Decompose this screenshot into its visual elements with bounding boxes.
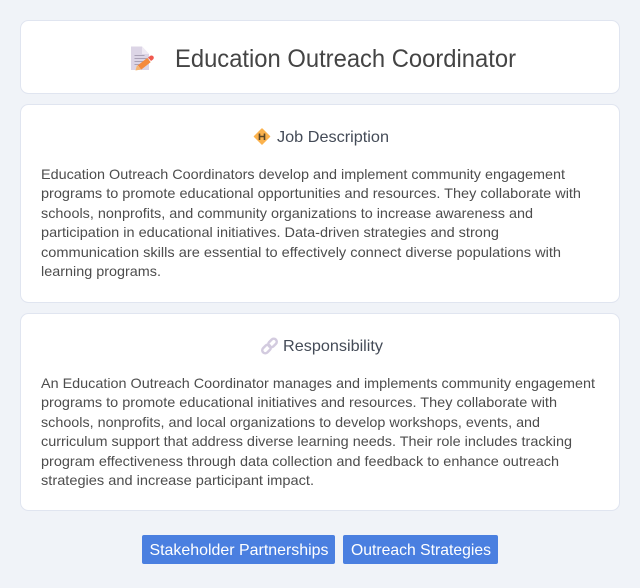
job description text: learning programs. <box>41 263 161 279</box>
panel: title <box>20 20 620 94</box>
responsibility text: schools, nonprofits, and local organizations to develop workshops, events, and <box>41 414 540 430</box>
responsibility heading: Responsibility <box>283 338 383 355</box>
job description text: programs to promote educational opportunities and resources. They collaborate with <box>41 185 581 201</box>
icon: orange diamond sign <box>254 129 270 144</box>
job description text: participation in educational initiatives. Data-driven strategies and strong <box>41 224 499 240</box>
tag: stakeholder partnerships <box>142 535 335 564</box>
job description heading: Job Description <box>277 129 389 146</box>
responsibility text: strategies and increase participant impact. <box>41 472 314 488</box>
responsibility text: curriculum support that address diverse learning needs. Their role includes tracking <box>41 433 572 449</box>
title text: Education Outreach Coordinator <box>175 45 516 73</box>
icon: chain link <box>261 338 278 354</box>
responsibility text <box>41 375 595 488</box>
icon: document with pencil <box>131 46 154 70</box>
job description text: schools, nonprofits, and community organizations to increase awareness and <box>41 205 533 221</box>
job description text: Education Outreach Coordinators develop and implement community engagement <box>41 166 565 182</box>
responsibility text: programs to promote educational initiatives and resources. They collaborate with <box>41 394 557 410</box>
panel: job description <box>20 104 620 302</box>
job description text <box>41 166 581 279</box>
tag: outreach strategies <box>343 535 498 564</box>
tag: stakeholder partnerships: Stakeholder Partnerships <box>150 542 328 559</box>
panel: responsibility <box>20 314 620 510</box>
responsibility text: An Education Outreach Coordinator manages and implements community engagement <box>41 375 595 391</box>
tag: outreach strategies: Outreach Strategies <box>351 542 491 559</box>
responsibility text: program effectiveness through data collection and feedback to enhance outreach <box>41 453 559 469</box>
job description text: communication skills are essential to effectively connect diverse populations with <box>41 244 561 260</box>
